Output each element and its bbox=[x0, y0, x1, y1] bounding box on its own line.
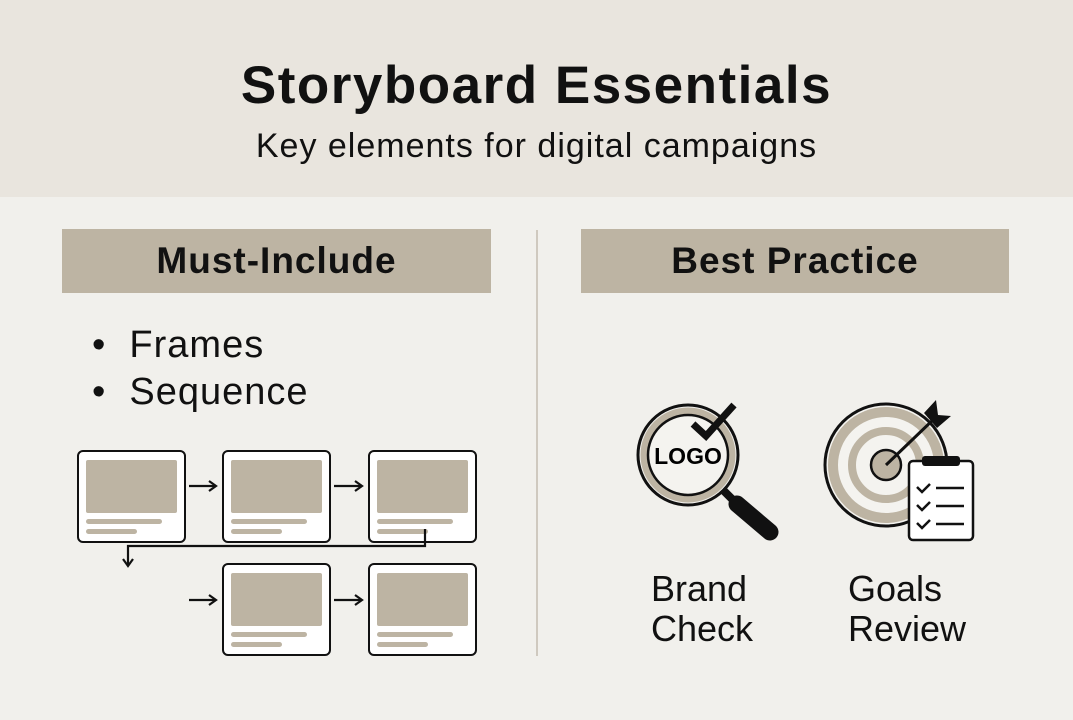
subtitle: Key elements for digital campaigns bbox=[256, 127, 817, 165]
title: Storyboard Essentials bbox=[241, 56, 832, 115]
label: Goals Review: Goals bbox=[848, 568, 942, 609]
panel heading: Must-Include bbox=[62, 229, 491, 293]
icon: magnifier with logo bbox=[636, 402, 778, 540]
label: Brand Check: Check bbox=[651, 608, 753, 649]
label: Goals Review: Review bbox=[848, 608, 966, 649]
label: Goals Review bbox=[848, 568, 966, 649]
icon: target with clipboard bbox=[824, 400, 974, 542]
label: Brand Check: Brand bbox=[651, 568, 747, 609]
bullet list: • Frames bbox=[92, 324, 264, 366]
panel heading: Best Practice bbox=[581, 229, 1009, 293]
panel heading: Best Practice: Best Practice bbox=[671, 240, 919, 281]
label: Brand Check bbox=[651, 568, 753, 649]
bullet list bbox=[92, 324, 309, 413]
bullet list: • Sequence bbox=[92, 371, 309, 413]
header band bbox=[0, 0, 1073, 197]
icon: magnifier with logo: LOGO bbox=[654, 443, 722, 469]
panel heading: Must-Include: Must-Include bbox=[156, 240, 397, 281]
